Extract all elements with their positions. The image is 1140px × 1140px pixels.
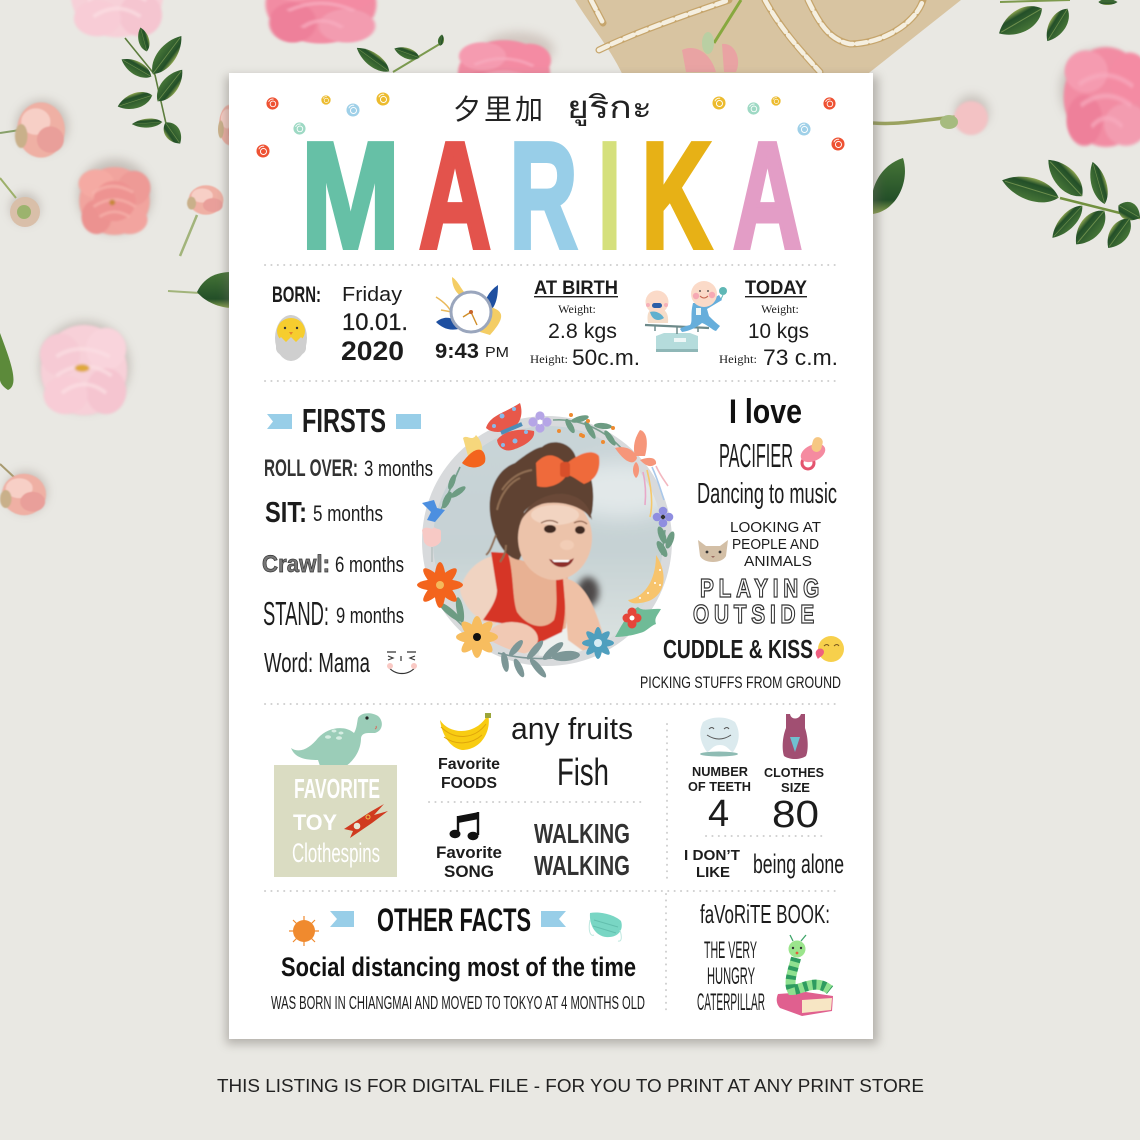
flower blue — [422, 500, 445, 522]
icon: clothespin — [344, 804, 388, 838]
book title: HUNGRY — [707, 963, 755, 990]
ribbon left — [330, 911, 354, 927]
favorite toy labels: FAVORITE — [294, 773, 380, 804]
stand: 9 months — [336, 603, 404, 628]
flower purple — [528, 411, 552, 433]
icon: face mask — [589, 912, 622, 941]
icon: bananas — [440, 713, 491, 750]
teeth label — [688, 764, 751, 794]
header: name in script: 夕里加 — [453, 94, 543, 125]
picking stuffs: PICKING STUFFS FROM GROUND — [640, 673, 841, 692]
playing outside — [693, 574, 824, 629]
teeth count: 4 — [708, 793, 729, 835]
foods answers — [511, 711, 633, 794]
leaf far left — [0, 333, 13, 390]
song answer: WALKING — [534, 818, 630, 849]
rose: partial behind card — [218, 105, 241, 145]
looking at people and animals: PEOPLE AND — [732, 536, 819, 553]
leaves top right — [993, 0, 1118, 45]
looking at people and animals: LOOKING AT — [730, 519, 821, 536]
panel: favorite book — [697, 899, 833, 1016]
crawl: 6 months — [335, 552, 404, 577]
rose shadow: top centre — [482, 32, 554, 68]
dancing: Dancing to music — [697, 478, 837, 510]
footer note: THIS LISTING IS FOR DIGITAL FILE - FOR YOU TO PRINT AT ANY PRINT STORE — [217, 1075, 924, 1096]
birth date: 2020 — [341, 336, 404, 366]
cuddle and kiss: CUDDLE & KISS — [663, 634, 813, 664]
header: name in script: ยูริกะ — [567, 90, 652, 126]
social distancing: Social distancing most of the time — [281, 952, 636, 982]
at birth stats — [530, 278, 640, 370]
leaf near card — [872, 158, 905, 214]
leaves: top centre — [353, 34, 445, 77]
clothes size: 80 — [772, 794, 819, 836]
song label — [436, 843, 502, 881]
stand: STAND: — [263, 595, 329, 632]
icon: music note — [450, 812, 479, 840]
wreath stems — [436, 420, 665, 659]
sit: SIT: — [265, 497, 307, 529]
foods label: FOODS — [441, 775, 497, 792]
other facts heading: OTHER FACTS — [377, 902, 531, 938]
song label: Favorite — [436, 843, 502, 862]
foods answers: Fish — [557, 752, 609, 794]
ribbon right — [541, 911, 566, 927]
at birth stats: Height: — [530, 352, 568, 366]
birth date — [341, 284, 408, 366]
birth time: 9:43 — [435, 340, 479, 363]
confetti dots — [256, 92, 845, 158]
crawl: Crawl: — [262, 551, 330, 578]
icon: babies on a weighing scale — [645, 281, 727, 352]
roses and leaves scattered on the left — [0, 0, 554, 515]
panel: favorite foods — [438, 711, 633, 794]
rose: bottom left — [0, 464, 46, 515]
icon: tooth — [700, 718, 739, 756]
birth date: Friday — [342, 284, 402, 306]
looking at people and animals: ANIMALS — [744, 553, 812, 570]
title: MARIKA coloured letters: A — [733, 110, 802, 280]
playing outside: PLAYING — [700, 574, 824, 603]
rose: hot pink right — [1064, 47, 1140, 147]
foods label: Favorite — [438, 756, 500, 773]
rose: bud with stem near card — [180, 185, 223, 256]
firsts heading: FIRSTS — [302, 402, 386, 439]
baby photo in flower wreath — [417, 403, 680, 679]
poster card shadow — [226, 76, 878, 1044]
panel: teeth and clothes — [684, 714, 844, 881]
rose: salmon bud left — [0, 102, 65, 158]
panel: favorite song — [436, 812, 630, 881]
title: MARIKA coloured letters: R — [510, 110, 578, 280]
favorite toy labels: Clothespins — [292, 838, 380, 868]
song answer: WALKING — [534, 850, 630, 881]
at birth stats: Weight: — [558, 302, 596, 316]
first word: Word: Mama — [264, 647, 370, 678]
clothes label — [764, 765, 824, 795]
icon: dinosaur — [291, 713, 382, 766]
birth time — [435, 340, 509, 363]
section: firsts — [262, 402, 433, 678]
favorite toy labels — [292, 773, 380, 868]
sit: 5 months — [313, 501, 383, 526]
roll over: 3 months — [364, 456, 433, 481]
foods answers: any fruits — [511, 711, 633, 746]
roses and leaves on the right — [872, 0, 1140, 253]
today stats: Height: — [719, 352, 757, 366]
butterfly salmon — [615, 430, 656, 478]
ribbon left — [267, 414, 292, 429]
rose: bud with stem — [873, 101, 988, 135]
teeth label: NUMBER — [692, 764, 749, 779]
today stats: 10 kgs — [748, 320, 809, 343]
icon: clock with leaves — [436, 277, 501, 335]
flower violet — [653, 507, 673, 527]
rose: salmon centre left — [78, 167, 150, 235]
dislike answer: being alone — [753, 849, 844, 879]
title: MARIKA coloured letters: M — [301, 110, 400, 280]
kraft gift package — [575, 0, 961, 80]
leaf branch right — [999, 153, 1140, 253]
crawl — [262, 551, 404, 578]
clothes label: CLOTHES — [764, 765, 824, 780]
birth time: PM — [485, 344, 509, 361]
born label: BORN: — [272, 282, 321, 307]
I love heading: I love — [729, 393, 802, 431]
at birth stats: 2.8 kgs — [548, 320, 617, 343]
foods label — [438, 756, 500, 792]
today stats: 73 c.m. — [763, 345, 838, 370]
grey leaves — [500, 638, 580, 679]
roll over: ROLL OVER: — [264, 455, 358, 482]
rose shadows — [955, 50, 1140, 130]
wreath leaves — [437, 414, 676, 624]
title: MARIKA coloured letters: A — [419, 110, 491, 280]
icon: chick in egg — [275, 315, 307, 361]
dislike label: LIKE — [696, 865, 730, 881]
dislike label: I DON’T — [684, 848, 740, 864]
at birth stats: 50c.m. — [572, 345, 640, 370]
rose shadows — [5, 100, 152, 513]
favorite toy labels: TOY — [293, 810, 337, 835]
teeth label: OF TEETH — [688, 779, 751, 794]
streamers — [643, 466, 668, 517]
today stats: Weight: — [761, 302, 799, 316]
header: name in script — [453, 90, 652, 126]
dislike label — [684, 848, 740, 881]
butterfly red — [486, 403, 534, 451]
sit — [265, 497, 383, 529]
section: I love — [640, 393, 844, 692]
grey ring — [422, 416, 672, 666]
flower red with leaves — [615, 607, 661, 637]
ribbon right — [396, 414, 421, 429]
rose: small bud — [0, 178, 40, 227]
banana moon — [628, 555, 664, 603]
clothes label: SIZE — [781, 780, 810, 795]
icon: cat — [698, 540, 728, 562]
flower blue small — [582, 627, 614, 659]
rose: top centre behind card — [458, 40, 551, 106]
book title: THE VERY — [704, 937, 757, 964]
toy card — [274, 765, 397, 877]
today stats: TODAY — [745, 278, 807, 299]
icon: romper — [783, 714, 808, 759]
flower orange — [417, 562, 463, 608]
panel: other facts — [271, 902, 645, 1013]
book heading: faVoRiTE BOOK: — [700, 899, 830, 929]
rose: pale pink large — [40, 325, 127, 415]
tulip orange yellow — [462, 435, 485, 467]
section: birth details — [272, 277, 838, 370]
title: MARIKA coloured letters: I — [598, 110, 620, 280]
pacifier: PACIFIER — [719, 437, 793, 474]
icon: virus — [289, 916, 319, 946]
birth date: 10.01. — [342, 309, 408, 336]
rose: top centre — [266, 0, 378, 43]
book title — [697, 937, 765, 1016]
panel: favorite book: CATERPILLAR — [697, 989, 765, 1016]
photo — [433, 426, 662, 656]
song answer — [534, 818, 630, 881]
song label: SONG — [444, 862, 494, 881]
birthplace note: WAS BORN IN CHIANGMAI AND MOVED TO TOKYO AT 4 MONTHS OLD — [271, 993, 645, 1013]
playing outside: OUTSIDE — [693, 600, 819, 629]
today stats — [719, 278, 838, 370]
poster card — [229, 73, 873, 1039]
flower yellow — [456, 616, 498, 658]
title: MARIKA coloured letters — [301, 110, 802, 280]
orange berries — [557, 413, 615, 444]
panel: favorite toy — [274, 713, 397, 877]
at birth stats: AT BIRTH — [534, 278, 618, 299]
title: MARIKA coloured letters: K — [642, 110, 712, 280]
rose: top left — [70, 0, 163, 37]
leaf branch top left — [115, 26, 189, 148]
looking at people and animals — [730, 519, 821, 570]
tulip pink — [422, 527, 441, 562]
icon: caterpillar on a book — [777, 935, 833, 1016]
leaf at card edge — [168, 272, 232, 308]
icon: smiling face — [387, 652, 417, 674]
